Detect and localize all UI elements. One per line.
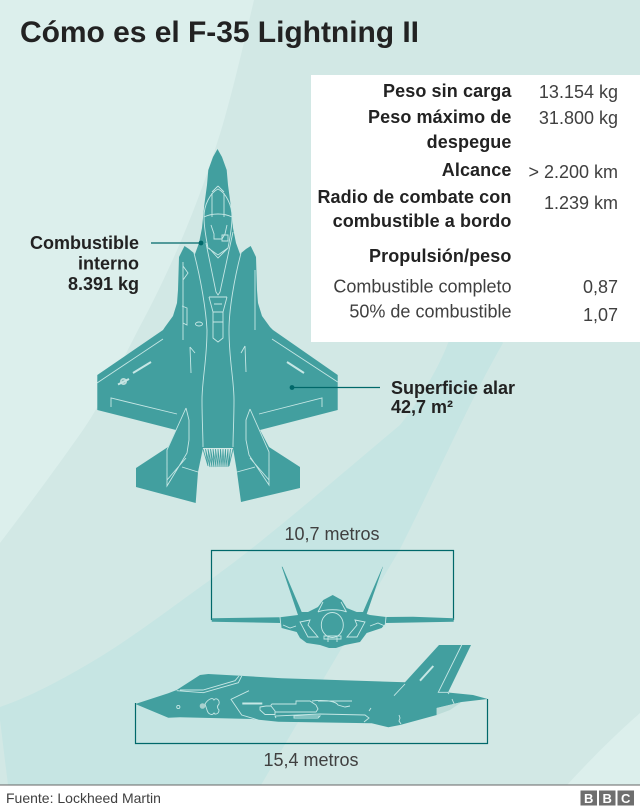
row: combustible completo [333, 276, 618, 297]
callout: superficie alar: Superficie alar [391, 378, 515, 398]
row: 50% de combustible: 50% de combustible [349, 302, 512, 322]
row: alcance: Alcance [442, 160, 512, 180]
title: Cómo es el F-35 Lightning II [20, 16, 419, 49]
BBC logo: C [621, 791, 631, 806]
panel: specifications table [311, 75, 640, 342]
footer [0, 784, 640, 810]
top view aircraft [97, 149, 338, 503]
BBC logo: B [584, 791, 593, 806]
row: 50% de combustible: 1,07 [583, 305, 618, 325]
row: peso sin carga: 13.154 kg [539, 82, 618, 102]
exhaust nozzle [203, 449, 233, 467]
row: radio de combate: 1.239 km [544, 193, 618, 213]
callout: combustible interno: Combustible [30, 233, 139, 253]
length box [136, 699, 488, 744]
roundel [118, 378, 129, 385]
row: peso máximo de despegue: despegue [427, 132, 512, 152]
row: peso máximo de despegue: 31.800 kg [539, 108, 618, 128]
row: peso sin carga: Peso sin carga [383, 81, 512, 101]
wingspan box [212, 550, 454, 620]
BBC logo: B [603, 791, 612, 806]
label: length: 15,4 metros [263, 750, 359, 770]
row: radio de combate: combustible a bordo [333, 211, 512, 231]
row: peso máximo de despegue: Peso máximo de [368, 107, 512, 127]
BBC logo [580, 790, 634, 806]
row: peso sin carga [383, 81, 618, 102]
source: Fuente: Lockheed Martin [6, 790, 161, 806]
callout: combustible interno: 8.391 kg [68, 274, 139, 294]
side view aircraft [135, 645, 488, 744]
row: radio de combate [317, 187, 618, 231]
callout: combustible interno [30, 233, 203, 294]
row: combustible completo: Combustible completo [333, 276, 512, 296]
subheading: propulsión/peso: Propulsión/peso [369, 246, 512, 266]
callout: superficie alar [290, 378, 515, 417]
row: combustible completo: 0,87 [583, 277, 618, 297]
row: peso máximo de despegue [368, 107, 618, 152]
callout: combustible interno: interno [78, 254, 139, 274]
callout: superficie alar: 42,7 m² [391, 397, 453, 417]
canopy and fuselage lines [97, 186, 338, 486]
row: 50% de combustible [349, 302, 618, 325]
row: radio de combate: Radio de combate con [317, 187, 512, 207]
front view aircraft [212, 550, 454, 648]
row: alcance [442, 160, 618, 182]
row: alcance: > 2.200 km [528, 162, 618, 182]
label: wingspan: 10,7 metros [284, 524, 380, 544]
